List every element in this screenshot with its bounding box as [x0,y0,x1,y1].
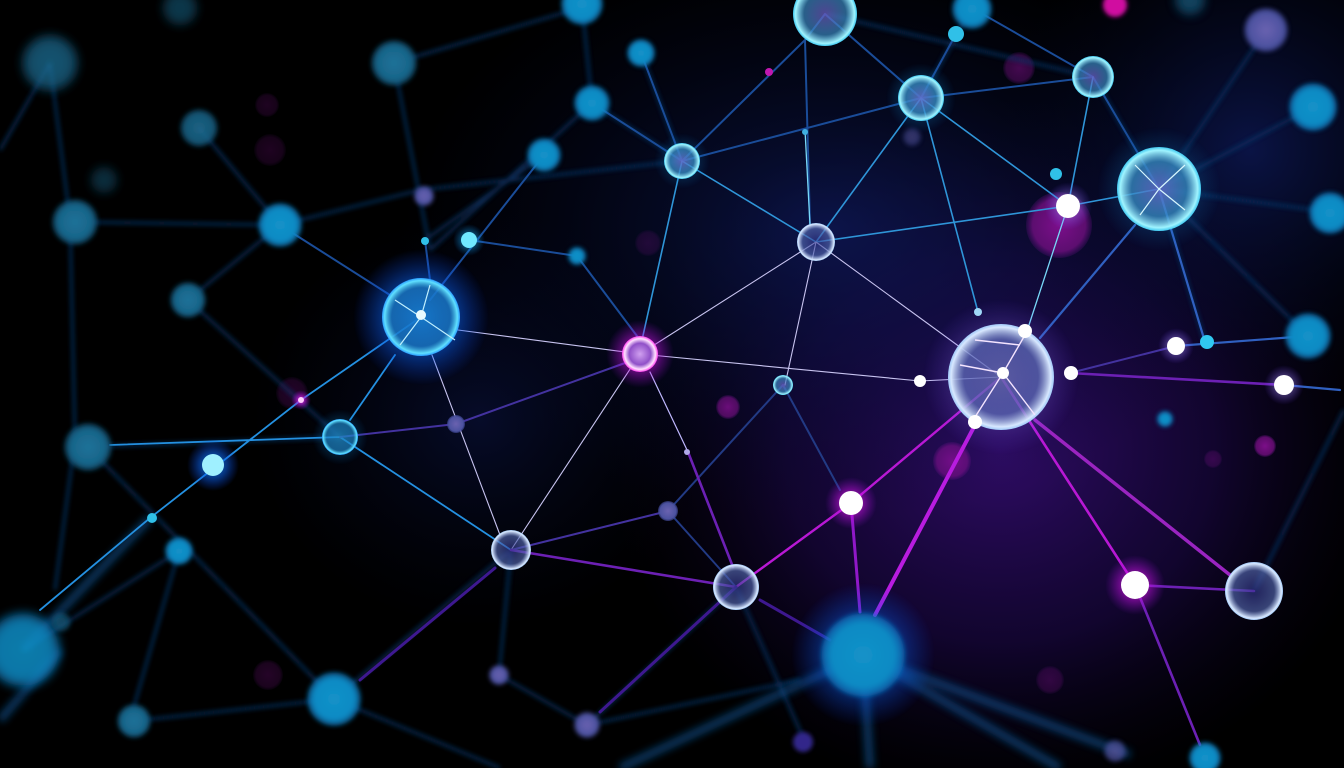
node: glass sphere, central hub [923,299,1079,455]
node: glass sphere, left hub [353,249,489,385]
magenta and purple connections [340,346,1284,745]
sharp white connections [432,242,1001,550]
node: large blue glow sphere, bottom centre [791,583,935,727]
bright white and magenta light nodes [147,26,1304,615]
sharp blue connections [40,8,1340,610]
blurred thick foreground connections [0,518,1130,768]
node: magenta glass hub [606,320,674,388]
medium glass nodes [312,0,1283,620]
node: glass sphere, upper right hub [1097,127,1221,251]
bokeh: magenta background dots [253,0,1276,694]
